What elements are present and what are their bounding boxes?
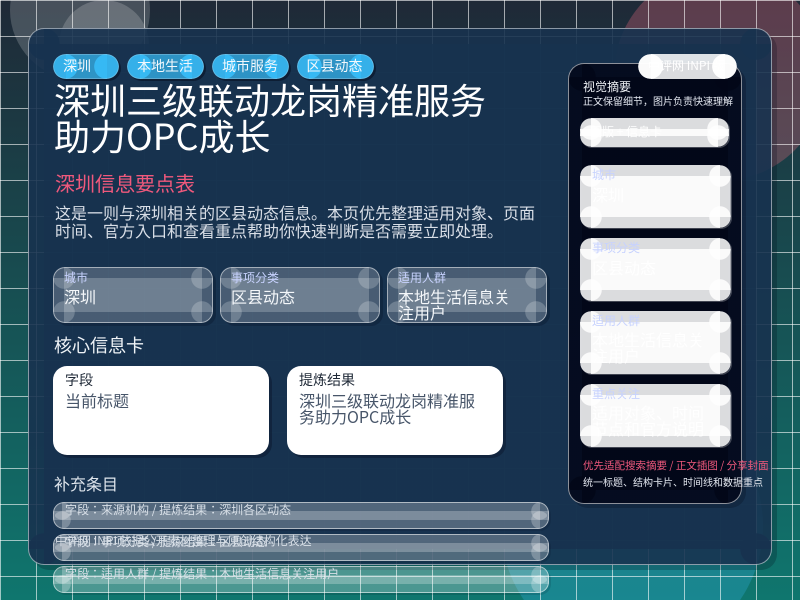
tile: 事项分类: 事项分类 bbox=[231, 269, 279, 286]
tag: 本地生活 bbox=[127, 54, 204, 79]
panel card: 重点关注: 适用对象、时间 bbox=[592, 400, 704, 424]
tile: 城市: 深圳 bbox=[64, 284, 96, 308]
badge pill bbox=[638, 54, 737, 79]
tag: 区县动态 bbox=[296, 54, 374, 79]
list row 1 text: 字段：来源机构 / 提炼结果：深圳各区动态 bbox=[65, 501, 291, 518]
badge pill: 中评网 INPI 版 bbox=[648, 57, 725, 74]
list row 2 bbox=[53, 534, 549, 561]
white card: 字段 bbox=[53, 366, 269, 455]
panel card: 适用人群: 适用人群 bbox=[592, 312, 640, 329]
panel card: 城市 bbox=[580, 165, 730, 228]
tile: 事项分类: 区县动态 bbox=[231, 284, 295, 308]
panel subheading: 正文保留细节，图片负责快速理解 bbox=[583, 93, 733, 108]
panel card: 城市: 城市 bbox=[592, 166, 616, 183]
panel red caption: 优先适配搜索摘要 / 正文插图 / 分享封面 bbox=[583, 458, 769, 473]
panel pill: 图版: 图版 + 信息卡 bbox=[590, 123, 662, 140]
panel pill: 图版 bbox=[580, 118, 729, 147]
panel card: 重点关注: 重点关注 bbox=[592, 385, 640, 402]
white card: 字段: 字段 bbox=[65, 370, 93, 390]
tile: 事项分类 bbox=[220, 267, 380, 323]
white card: 提炼结果 bbox=[287, 366, 503, 455]
tile: 适用人群: 本地生活信息关 bbox=[398, 284, 510, 308]
panel card: 城市: 深圳 bbox=[592, 182, 624, 206]
title bbox=[54, 73, 486, 161]
list row 1 bbox=[53, 502, 549, 529]
panel card: 重点关注 bbox=[580, 384, 730, 447]
white card: 提炼结果: 提炼结果 bbox=[299, 370, 355, 390]
tile: 适用人群: 注用户 bbox=[398, 300, 446, 324]
intro paragraph: 时间、官方入口和查看重点帮助你快速判断是否需要立即处理。 bbox=[55, 218, 503, 242]
list row 2 text: 字段：事项分类 / 提炼结果：区县动态 bbox=[65, 533, 267, 550]
panel card: 事项分类 bbox=[580, 238, 730, 301]
white card: 提炼结果: 务助力OPC成长 bbox=[299, 404, 411, 428]
panel card: 重点关注: 节点和官方说明 bbox=[592, 416, 704, 440]
panel card: 事项分类: 事项分类 bbox=[592, 239, 640, 256]
list row 3 text: 字段：适用人群 / 提炼结果：本地生活信息关注用户 bbox=[65, 565, 339, 582]
panel heading: 视觉摘要 bbox=[583, 78, 631, 95]
intro paragraph bbox=[55, 200, 535, 242]
tile: 城市: 城市 bbox=[64, 269, 88, 286]
white card: 提炼结果: 深圳三级联动龙岗精准服 bbox=[299, 388, 475, 412]
tile: 适用人群: 适用人群 bbox=[398, 269, 446, 286]
heading: 核心信息卡: 核心信息卡 bbox=[54, 332, 144, 358]
tile: 适用人群 bbox=[387, 267, 547, 323]
tag: 本地生活: 本地生活 bbox=[137, 56, 193, 76]
white card: 字段: 当前标题 bbox=[65, 388, 129, 412]
right dark panel bbox=[568, 63, 742, 504]
title: 助力OPC成长 bbox=[54, 109, 270, 161]
footer source note: 中评网 INPI 依据公开素材整理与原创结构化表达 bbox=[55, 532, 312, 549]
title: 深圳三级联动龙岗精准服务 bbox=[54, 73, 486, 125]
list row 3 bbox=[53, 566, 549, 593]
panel card: 事项分类: 区县动态 bbox=[592, 255, 656, 279]
panel card: 适用人群 bbox=[580, 311, 730, 374]
tag: 区县动态: 区县动态 bbox=[306, 56, 362, 76]
subtitle: 深圳信息要点表 bbox=[55, 168, 195, 197]
tile: 城市 bbox=[53, 267, 213, 323]
tag: 深圳 bbox=[53, 54, 119, 79]
tag: 城市服务: 城市服务 bbox=[222, 56, 278, 76]
intro paragraph: 这是一则与深圳相关的区县动态信息。本页优先整理适用对象、页面 bbox=[55, 200, 535, 224]
panel caption note: 统一标题、结构卡片、时间线和数据重点 bbox=[583, 474, 763, 489]
heading: 补充条目: 补充条目 bbox=[54, 471, 118, 495]
panel card: 适用人群: 本地生活信息关 bbox=[592, 327, 704, 351]
tag: 城市服务 bbox=[212, 54, 289, 79]
panel card: 适用人群: 注用户 bbox=[592, 343, 640, 367]
tag: 深圳: 深圳 bbox=[63, 56, 91, 76]
